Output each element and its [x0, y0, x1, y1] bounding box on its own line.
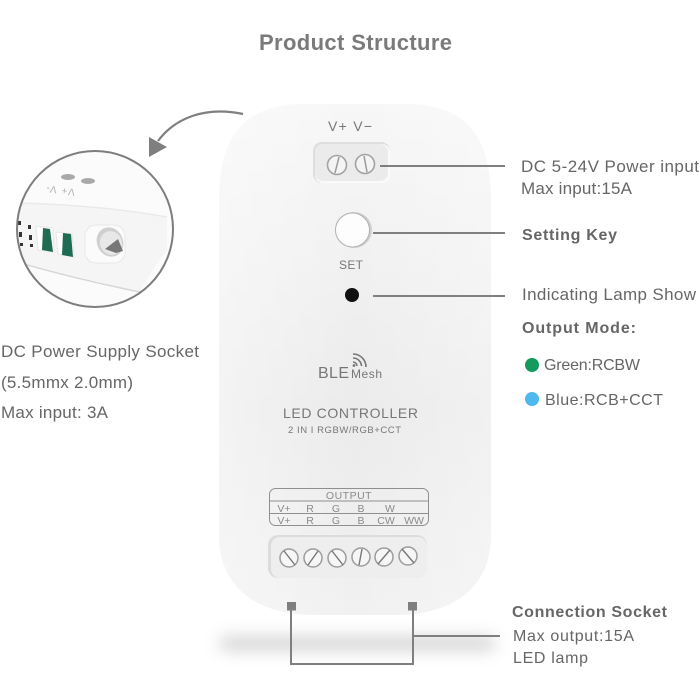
output label table: R [306, 515, 314, 527]
icon: detail circle of power socket [17, 151, 173, 307]
text: power supply socket [1, 342, 199, 422]
setting key button [336, 212, 372, 248]
text: connection socket: Connection Socket [512, 604, 668, 621]
logo: BLE Mesh: BLE [318, 365, 349, 382]
output mode legend: Blue:RCB+CCT [545, 392, 663, 409]
label: SET: SET [339, 258, 364, 272]
output label table: G [332, 515, 340, 527]
output label table: OUTPUT [326, 490, 372, 502]
output mode legend: Output Mode: [522, 320, 636, 337]
output mode legend: Green:RCBW [544, 357, 641, 374]
output label table: G [332, 503, 340, 515]
text: connection socket: Max output:15A [513, 628, 634, 645]
output label table: B [357, 503, 365, 515]
product name [283, 405, 418, 436]
text: power input: Max input:15A [521, 179, 633, 198]
text: power supply socket: Max input: 3A [1, 403, 109, 422]
output label table: V+ [277, 515, 291, 527]
text: power input: DC 5-24V Power input [521, 157, 699, 176]
output label table: CW [377, 515, 395, 527]
product name: 2 IN I RGBW/RGB+CCT [288, 425, 401, 436]
output mode legend [522, 320, 663, 409]
output label table: R [306, 503, 314, 515]
text: setting key: Setting Key [522, 227, 617, 244]
indicator lamp [345, 288, 359, 302]
text: connection socket: LED lamp [513, 650, 588, 667]
panel: controller body [219, 104, 491, 615]
output terminal block [268, 535, 427, 578]
logo: BLE Mesh [318, 354, 382, 382]
text: indicating lamp: Indicating Lamp Show [522, 285, 697, 304]
output label table: W [385, 503, 395, 515]
output label table: B [357, 515, 365, 527]
arrow: curved to detail circle [149, 112, 243, 157]
text: power input [521, 157, 699, 198]
output label table: V+ [277, 503, 291, 515]
text: power supply socket: (5.5mmx 2.0mm) [1, 373, 133, 392]
leader lines [291, 166, 505, 664]
output label table [270, 488, 428, 527]
shadow under controller [220, 637, 495, 650]
logo: BLE Mesh: Mesh [351, 367, 382, 381]
icon: detail circle of power socket: V+ V- [45, 182, 76, 197]
title: Product Structure [259, 30, 452, 55]
power terminal block [313, 142, 390, 183]
connection markers [287, 602, 417, 610]
product name: LED CONTROLLER [283, 405, 418, 421]
label: power terminals: V+ V− [328, 118, 372, 134]
text: connection socket [512, 604, 668, 667]
text: power supply socket: DC Power Supply Socket [1, 342, 199, 361]
output label table: WW [404, 515, 424, 527]
